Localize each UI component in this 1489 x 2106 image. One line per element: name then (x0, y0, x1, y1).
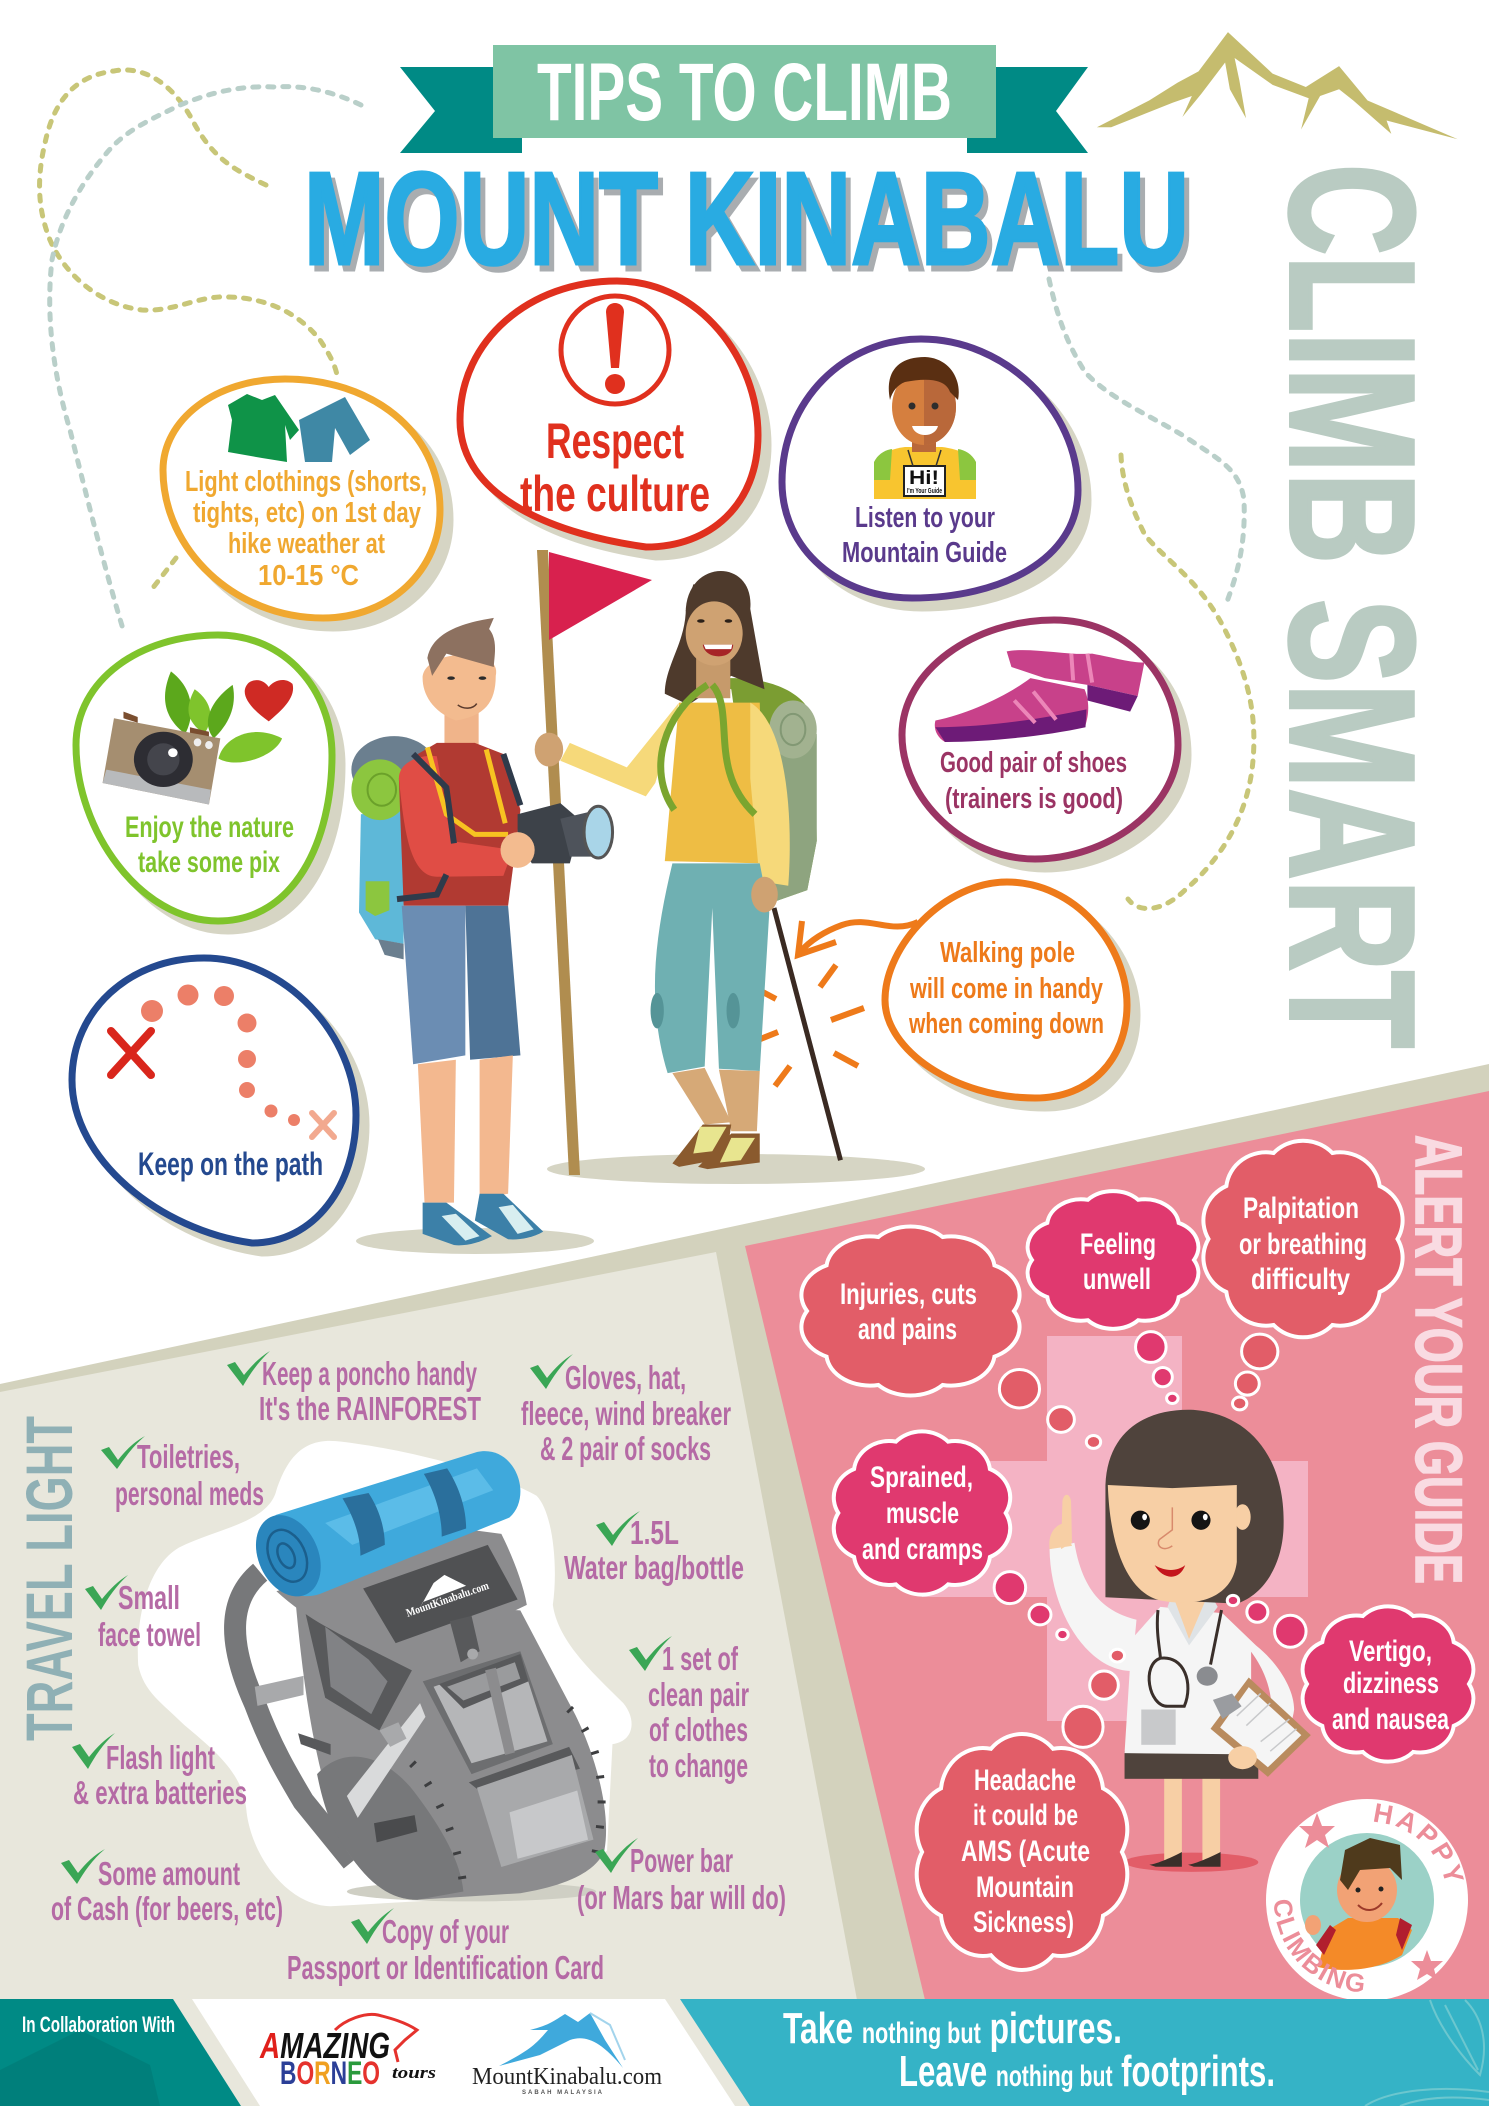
list: keep a poncho: Keep a poncho handy (262, 1355, 477, 1392)
cloud: headache (917, 1734, 1127, 1970)
cloud: feeling unwell: Feeling (1080, 1228, 1156, 1261)
cloud: feeling unwell: unwell (1083, 1263, 1151, 1296)
illustration: woman hiker (535, 571, 840, 1169)
bubble: respect the culture (460, 281, 758, 547)
logo: MountKinabalu.com (472, 2013, 662, 2096)
dashed trails (40, 70, 1254, 909)
list: gloves: fleece, wind breaker (521, 1395, 731, 1432)
title: Mount Kinabalu: MOUNT KINABALU (309, 151, 1194, 298)
list: clothes: to change (649, 1747, 748, 1784)
medical cross (922, 1336, 1308, 1721)
bubble: mountain guide: Listen to your (855, 502, 995, 534)
bubble: light clothings: Light clothings (shorts, (185, 466, 427, 498)
list: water: 1.5L (630, 1514, 679, 1551)
logo: MountKinabalu.com: SABAH MALAYSIA (522, 2090, 603, 2096)
arrow: to walking pole (748, 921, 918, 1086)
icon: shoes (935, 650, 1144, 742)
badge: happy climbing (1266, 1799, 1468, 1999)
list: flash light: Flash light (106, 1739, 215, 1776)
illustration: man hiker (351, 618, 613, 1245)
list: clothes: 1 set of (662, 1640, 739, 1677)
banner: tips to climb (400, 45, 1088, 153)
cloud: headache: it could be (973, 1799, 1078, 1832)
heading: alert your guide: ALERT YOUR GUIDE (1402, 1135, 1476, 1584)
title: Mount Kinabalu: MOUNT KINABALU (304, 145, 1189, 292)
bubble: mountain guide (782, 339, 1078, 598)
cloud: sprained: Sprained, (870, 1461, 973, 1494)
list: cash: Some amount (98, 1855, 240, 1892)
list: toiletries: Toiletries, (137, 1438, 240, 1475)
list: cash (51, 1849, 283, 1927)
logo: MountKinabalu.com: MountKinabalu.com (472, 2064, 662, 2090)
footer leaves (1365, 2000, 1489, 2106)
badge: happy climbing: CLIMBING (1274, 1900, 1364, 1992)
list: keep a poncho (227, 1351, 481, 1427)
list: gloves: & 2 pair of socks (540, 1430, 711, 1467)
cloud: palpitation (1203, 1141, 1403, 1337)
list: passport: Copy of your (382, 1913, 509, 1950)
list: clothes: of clothes (649, 1711, 748, 1748)
bubble: walking pole: when coming down (908, 1008, 1104, 1040)
cloud: sprained (834, 1431, 1010, 1595)
cloud: headache: Headache (974, 1764, 1076, 1797)
bubble: light clothings (163, 379, 440, 618)
bubble: light clothings: 10-15 °C (258, 560, 359, 592)
bubble: good pair of shoes (902, 620, 1178, 859)
logo: Amazing Borneo tours: AMAZING (259, 2025, 390, 2066)
list: water: Water bag/bottle (564, 1549, 744, 1586)
banner: tips to climb: TIPS TO CLIMB (537, 47, 952, 138)
illustration: doctor (1049, 1410, 1311, 1872)
cloud: sprained: and cramps (862, 1533, 983, 1566)
list: passport (287, 1908, 604, 1986)
slogan (783, 2004, 1275, 2096)
heading: climb smart: CLIMB SMART (1253, 164, 1451, 1048)
cloud: vertigo: Vertigo, (1349, 1635, 1432, 1668)
logo: Amazing Borneo tours: BORNEO (280, 2055, 380, 2091)
list: passport: Passport or Identification Card (287, 1949, 604, 1986)
list: power bar: Power bar (630, 1842, 733, 1879)
cloud: palpitation: difficulty (1251, 1263, 1350, 1296)
list: gloves (521, 1354, 731, 1467)
flag (537, 550, 652, 1175)
cloud: headache: AMS (Acute (961, 1835, 1090, 1868)
heading: travel light: TRAVEL LIGHT (12, 1416, 86, 1741)
list: clothes (629, 1636, 749, 1784)
list: gloves: Gloves, hat, (565, 1359, 686, 1396)
list: flash light: & extra batteries (73, 1774, 247, 1811)
list: towel: face towel (98, 1616, 201, 1653)
bubble: mountain guide: Mountain Guide (842, 537, 1007, 569)
bubble: light clothings: tights, etc) on 1st day (193, 497, 421, 529)
list: power bar (577, 1838, 786, 1916)
bubble: keep on the path: Keep on the path (138, 1146, 323, 1182)
backpack backdrop (138, 1441, 632, 1906)
cloud: headache: Sickness) (973, 1906, 1074, 1939)
bubble: enjoy the nature: take some pix (138, 846, 280, 879)
slogan: Take nothing but pictures. (783, 2004, 1122, 2053)
bubble: respect the culture: Respect (546, 413, 684, 469)
bubble: walking pole (885, 882, 1127, 1098)
footer (0, 1999, 1489, 2106)
bubble: good pair of shoes: (trainers is good) (945, 783, 1123, 815)
slogan: Leave nothing but footprints. (899, 2047, 1275, 2096)
logo: Amazing Borneo tours: tours (392, 2063, 436, 2082)
cloud: palpitation: Palpitation (1243, 1192, 1359, 1225)
bubble: good pair of shoes: Good pair of shoes (940, 747, 1127, 779)
cloud: feeling unwell (1028, 1191, 1198, 1329)
list: toiletries (101, 1436, 264, 1512)
icon: camera, leaves and heart (103, 671, 293, 804)
list: towel: Small (118, 1579, 180, 1616)
list: towel (85, 1575, 201, 1653)
cloud: headache: Mountain (976, 1871, 1074, 1904)
cloud: injuries: Injuries, cuts (840, 1278, 977, 1311)
cloud: injuries: and pains (858, 1313, 957, 1346)
bubble: keep on the path (72, 958, 356, 1243)
bubble: enjoy the nature (76, 635, 332, 921)
cloud: sprained: muscle (886, 1497, 959, 1530)
list: power bar: (or Mars bar will do) (577, 1879, 786, 1916)
bubble: mountain guide: Hi! (909, 468, 939, 489)
illustration: backpack (235, 1451, 606, 1901)
bubble: walking pole: Walking pole (940, 937, 1075, 969)
ground shadows (356, 1154, 925, 1254)
collaboration label: In Collaboration With (22, 2012, 175, 2037)
list: clothes: clean pair (648, 1676, 749, 1713)
mountain illustration (1097, 32, 1458, 139)
bubble: respect the culture: the culture (520, 466, 710, 522)
list: flash light (72, 1733, 247, 1811)
illustration: backpack: MountKinabalu.com (405, 1580, 491, 1620)
bubble: light clothings: hike weather at (228, 528, 385, 560)
list: keep a poncho: It's the RAINFOREST (259, 1390, 481, 1427)
bubble: enjoy the nature: Enjoy the nature (125, 811, 294, 844)
badge: happy climbing: HAPPY (1374, 1803, 1464, 1880)
cloud: injuries (801, 1226, 1020, 1396)
cloud: palpitation: or breathing (1239, 1228, 1367, 1261)
logo: Amazing Borneo tours (259, 2014, 436, 2091)
bubble: walking pole: will come in handy (909, 973, 1103, 1005)
cloud: vertigo: dizziness (1343, 1667, 1439, 1700)
list: cash: of Cash (for beers, etc) (51, 1890, 283, 1927)
list: toiletries: personal meds (115, 1475, 264, 1512)
cloud: vertigo (1303, 1606, 1473, 1762)
thought bubbles: trails (994, 1332, 1306, 1747)
bubble: mountain guide: I'm Your Guide (907, 488, 942, 495)
list: water (564, 1511, 744, 1586)
panel: bottom sections (0, 1064, 1489, 2000)
